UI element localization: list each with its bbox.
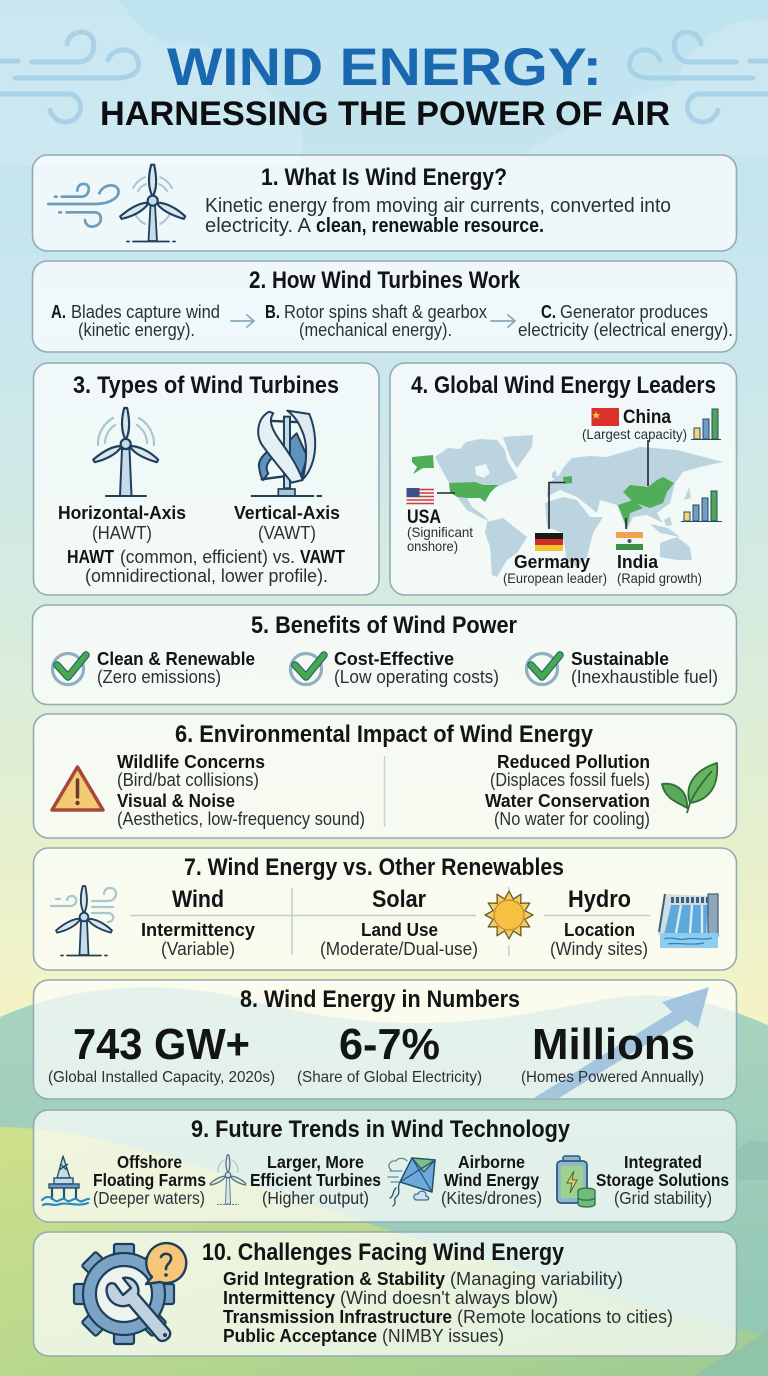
- step B: [265, 302, 487, 340]
- step B: Rotor spins shaft & gearbox: [284, 302, 487, 322]
- column: hydro: Location: [564, 919, 635, 940]
- icon: sun: [485, 891, 533, 939]
- China flag and label: [582, 407, 687, 442]
- panel: 3 types of wind turbines: [34, 363, 379, 595]
- trend: storage: (Grid stability): [614, 1188, 712, 1208]
- label: vertical axis: Vertical-Axis: [234, 502, 340, 523]
- title decoration: wind swirls right: [629, 32, 768, 122]
- title decoration: wind swirls left: [0, 32, 139, 122]
- icon: wind and turbine: [48, 165, 186, 242]
- heading: 7. Wind Energy vs. Other Renewables: [184, 854, 564, 881]
- trend: offshore: (Deeper waters): [93, 1188, 205, 1208]
- negative impacts: (Bird/bat collisions): [117, 770, 259, 790]
- growth arrow: [534, 987, 709, 1098]
- title: HARNESSING THE POWER OF AIR: [100, 95, 670, 133]
- challenge: public acceptance: Public Acceptance: [223, 1325, 377, 1346]
- text block: [205, 195, 671, 237]
- comparison text: VAWT: [300, 547, 345, 567]
- column: hydro: Hydro: [568, 886, 631, 913]
- USA flag and label: [406, 488, 473, 554]
- step C: C.: [541, 302, 556, 322]
- label: vertical axis: (VAWT): [258, 523, 316, 543]
- comparison text: (omnidirectional, lower profile).: [85, 566, 328, 586]
- Germany flag and label: Germany: [514, 551, 591, 572]
- world map: [412, 435, 723, 577]
- comparison text: [67, 547, 345, 586]
- column: solar: (Moderate/Dual-use): [320, 939, 478, 959]
- panel: 2 how wind turbines work: [32, 261, 736, 352]
- icon: battery storage: [557, 1156, 595, 1207]
- icon: vertical-axis turbine: [252, 411, 321, 496]
- column: solar: Land Use: [361, 919, 438, 940]
- positive impacts: [485, 751, 650, 829]
- trend: storage: [596, 1152, 729, 1208]
- positive impacts: (Displaces fossil fuels): [490, 770, 650, 790]
- icon: larger turbine: [209, 1155, 247, 1204]
- connector lines: [437, 440, 648, 529]
- label: vertical axis: [234, 502, 340, 543]
- step B: B.: [265, 302, 280, 322]
- icon: offshore platform: [42, 1156, 89, 1205]
- USA flag and label: USA: [407, 507, 441, 528]
- step C: [518, 302, 733, 340]
- stat: homes: (Homes Powered Annually): [521, 1069, 704, 1086]
- trend: larger turbines: (Higher output): [262, 1188, 369, 1208]
- trend: airborne: Wind Energy: [444, 1170, 539, 1190]
- heading: 1. What Is Wind Energy?: [261, 164, 507, 191]
- column: hydro: (Windy sites): [550, 939, 648, 959]
- title: [100, 38, 670, 133]
- column: wind: Wind: [172, 886, 224, 913]
- trend: larger turbines: Larger, More: [267, 1152, 364, 1172]
- icon: gear and wrench with question bubble: [74, 1243, 186, 1344]
- heading: 10. Challenges Facing Wind Energy: [202, 1239, 565, 1266]
- trend: airborne: Airborne: [458, 1152, 525, 1172]
- USA flag and label: onshore): [407, 538, 458, 554]
- trend: larger turbines: [250, 1152, 381, 1208]
- step A: (kinetic energy).: [78, 320, 195, 340]
- trend: storage: Integrated: [624, 1152, 702, 1172]
- icon: leaves: [662, 763, 717, 813]
- icon: horizontal-axis turbine: [92, 408, 159, 496]
- heading: 3. Types of Wind Turbines: [73, 372, 339, 399]
- comparison text: (common, efficient) vs.: [120, 547, 295, 567]
- benefit: sustainable: (Inexhaustible fuel): [571, 667, 718, 687]
- arrow A to B: [231, 315, 254, 327]
- bar chart: China: [691, 409, 721, 440]
- heading: 9. Future Trends in Wind Technology: [191, 1116, 571, 1143]
- Germany flag and label: [503, 533, 607, 586]
- text block: electricity. A: [205, 215, 312, 237]
- step A: [51, 302, 220, 340]
- challenge: transmission: (Remote locations to cities): [457, 1306, 673, 1327]
- heading: 6. Environmental Impact of Wind Energy: [175, 721, 594, 748]
- label: horizontal axis: [58, 502, 186, 543]
- trend: larger turbines: Efficient Turbines: [250, 1170, 381, 1190]
- column rules: [130, 887, 650, 956]
- negative impacts: (Aesthetics, low-frequency sound): [117, 809, 365, 829]
- panel: 7 vs other renewables: [34, 848, 736, 970]
- panel: 6 environmental impact: [34, 714, 736, 838]
- stat: capacity: 743 GW+: [73, 1020, 250, 1069]
- column: wind: Intermittency: [141, 919, 256, 940]
- step C: Generator produces: [560, 302, 708, 322]
- benefit: sustainable: [526, 648, 718, 687]
- positive impacts: Reduced Pollution: [497, 751, 650, 772]
- challenge: grid integration: [223, 1268, 623, 1289]
- icon: warning triangle: [52, 767, 103, 810]
- India flag and label: (Rapid growth): [617, 570, 702, 586]
- challenge: transmission: [223, 1306, 673, 1327]
- stat: share: 6-7%: [339, 1020, 440, 1069]
- challenge: public acceptance: [223, 1325, 504, 1346]
- USA flag and label: (Significant: [407, 524, 473, 540]
- challenge: intermittency: Intermittency: [223, 1287, 336, 1308]
- benefit: cost-effective: [290, 648, 499, 687]
- challenge: public acceptance: (NIMBY issues): [382, 1325, 504, 1346]
- challenge: transmission: Transmission Infrastructure: [223, 1306, 452, 1327]
- label: horizontal axis: Horizontal-Axis: [58, 502, 186, 523]
- step B: (mechanical energy).: [299, 320, 452, 340]
- negative impacts: [117, 751, 365, 829]
- panel: 10 challenges: [34, 1232, 736, 1356]
- trend: airborne: (Kites/drones): [441, 1188, 542, 1208]
- title: WIND ENERGY:: [167, 38, 602, 97]
- India flag and label: India: [617, 551, 659, 572]
- Germany flag and label: (European leader): [503, 570, 607, 586]
- icon: hydro dam: [658, 894, 718, 948]
- positive impacts: Water Conservation: [485, 790, 650, 811]
- trend: airborne: [441, 1152, 542, 1208]
- column: solar: [320, 886, 478, 959]
- benefit: sustainable: Sustainable: [571, 648, 669, 669]
- panel: 9 future trends: [34, 1110, 736, 1222]
- trend: storage: Storage Solutions: [596, 1170, 729, 1190]
- benefit: cost-effective: Cost-Effective: [334, 648, 454, 669]
- text block: Kinetic energy from moving air currents, converted into: [205, 195, 671, 217]
- column: wind: (Variable): [161, 939, 235, 959]
- benefit: clean and renewable: Clean & Renewable: [97, 648, 255, 669]
- column: wind: [141, 886, 256, 959]
- challenge: grid integration: Grid Integration & Stability: [223, 1268, 446, 1289]
- trend: offshore: Floating Farms: [93, 1170, 206, 1190]
- panel: 1 what is wind energy: [32, 155, 736, 251]
- benefit: cost-effective: (Low operating costs): [334, 667, 499, 687]
- heading: 5. Benefits of Wind Power: [251, 612, 517, 639]
- text block: clean, renewable resource.: [316, 215, 544, 237]
- step A: Blades capture wind: [71, 302, 220, 322]
- trend: offshore: Offshore: [117, 1152, 182, 1172]
- positive impacts: (No water for cooling): [494, 809, 650, 829]
- negative impacts: Visual & Noise: [117, 790, 235, 811]
- panel: 5 benefits of wind power: [32, 605, 736, 704]
- stat: capacity: [48, 1020, 275, 1086]
- heading: 2. How Wind Turbines Work: [249, 267, 521, 294]
- panel: 8 wind energy in numbers: [34, 980, 736, 1099]
- stat: share: (Share of Global Electricity): [297, 1069, 482, 1086]
- challenge: grid integration: (Managing variability): [450, 1268, 623, 1289]
- China flag and label: (Largest capacity): [582, 426, 687, 442]
- label: horizontal axis: (HAWT): [92, 523, 152, 543]
- icon: kite: [388, 1158, 435, 1206]
- stat: share: [297, 1020, 482, 1086]
- heading: 8. Wind Energy in Numbers: [240, 986, 520, 1013]
- step A: A.: [51, 302, 66, 322]
- column: solar: Solar: [372, 886, 426, 913]
- icon: turbine and wind: [51, 886, 116, 956]
- benefit: clean and renewable: (Zero emissions): [97, 667, 221, 687]
- negative impacts: Wildlife Concerns: [117, 751, 265, 772]
- heading: 4. Global Wind Energy Leaders: [411, 372, 716, 399]
- China flag and label: China: [623, 407, 671, 428]
- comparison text: HAWT: [67, 547, 114, 567]
- challenge: intermittency: [223, 1287, 558, 1308]
- arrow B to C: [491, 315, 515, 327]
- benefit: clean and renewable: [52, 648, 255, 687]
- stat: capacity: (Global Installed Capacity, 2020s): [48, 1069, 275, 1086]
- stat: homes: Millions: [532, 1020, 695, 1069]
- trend: offshore: [93, 1152, 206, 1208]
- stat: homes: [521, 1020, 704, 1086]
- India flag and label: [616, 532, 702, 586]
- bar chart: India: [681, 491, 722, 522]
- challenge: intermittency: (Wind doesn't always blow): [340, 1287, 558, 1308]
- step C: electricity (electrical energy).: [518, 320, 733, 340]
- panel: 4 global wind energy leaders: [390, 363, 736, 595]
- column: hydro: [550, 886, 648, 959]
